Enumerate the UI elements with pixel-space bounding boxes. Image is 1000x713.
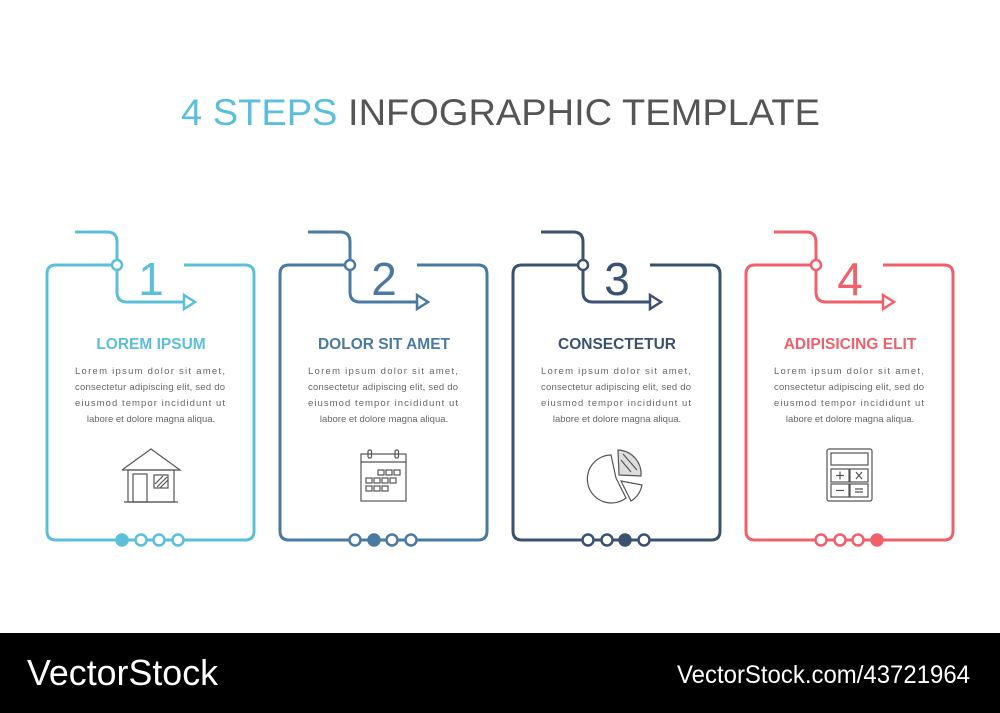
panel: step 1 [47,232,254,546]
footer bar [0,633,1000,713]
icon: calendar [361,450,406,501]
body text 1: Lorem ipsum dolor sit amet, [75,366,225,377]
number 3: 3 [604,253,630,305]
footer url: VectorStock.com/43721964 [677,661,970,689]
body text 3: labore et dolore magna aliqua. [553,414,681,425]
body text 3 [541,366,691,425]
dots 1 [116,534,184,546]
body text 1: consectetur adipiscing elit, sed do [75,382,225,393]
panel: step 4 [746,232,953,546]
icon: calculator [827,449,872,501]
heading 2: DOLOR SIT AMET [318,336,451,353]
dots 2 [350,534,416,546]
body text 4: consectetur adipiscing elit, sed do [774,382,924,393]
body text 4 [774,366,924,425]
number 2: 2 [371,253,397,305]
body text 4: labore et dolore magna aliqua. [786,414,914,425]
body text 2: Lorem ipsum dolor sit amet, [308,366,458,377]
body text 2 [308,366,458,425]
body text 1 [75,366,225,425]
body text 3: Lorem ipsum dolor sit amet, [541,366,691,377]
panel: step 2 [280,232,487,546]
icon: house [122,449,180,502]
heading 4: ADIPISICING ELIT [784,336,917,353]
body text 2: consectetur adipiscing elit, sed do [308,382,458,393]
number 4: 4 [837,253,863,305]
icon: pie chart [587,450,642,503]
title: 4 STEPS INFOGRAPHIC TEMPLATE [181,92,820,133]
heading 3: CONSECTETUR [558,336,676,353]
body text 3: consectetur adipiscing elit, sed do [541,382,691,393]
number 1: 1 [138,253,164,305]
body text 1: eiusmod tempor incididunt ut [75,398,225,409]
dots 4 [816,534,882,546]
body text 3: eiusmod tempor incididunt ut [541,398,691,409]
body text 1: labore et dolore magna aliqua. [87,414,215,425]
dots 3 [582,534,650,546]
footer logo text: VectorStock [27,652,219,693]
body text 4: Lorem ipsum dolor sit amet, [774,366,924,377]
heading 1: LOREM IPSUM [96,336,206,353]
body text 2: eiusmod tempor incididunt ut [308,398,458,409]
panel: step 3 [513,232,720,546]
body text 4: eiusmod tempor incididunt ut [774,398,924,409]
body text 2: labore et dolore magna aliqua. [320,414,448,425]
